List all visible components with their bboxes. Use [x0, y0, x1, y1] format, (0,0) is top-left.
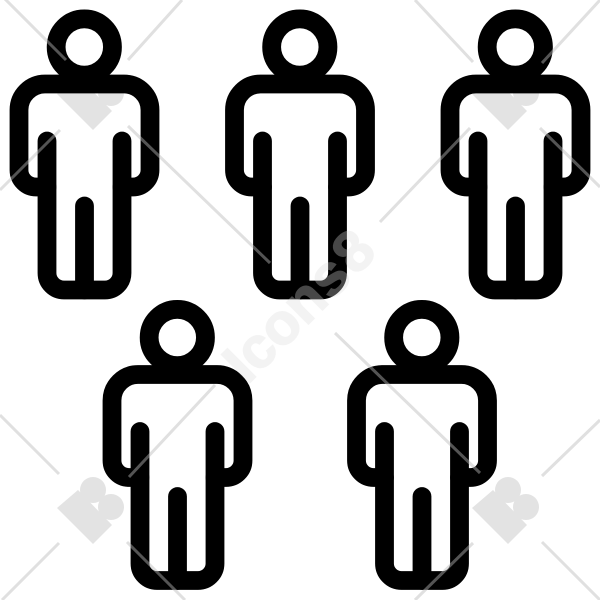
watermark logo: bottom right: [472, 477, 539, 544]
person icon: bottom left: [112, 309, 243, 580]
person icon: top left: [19, 19, 150, 290]
person icon: top centre: [234, 19, 366, 290]
watermark logo: bottom left: [57, 477, 124, 544]
watermark logo: top right: [472, 63, 539, 130]
person icon: bottom right: [356, 309, 488, 580]
watermark text: Icons8: [210, 217, 388, 395]
watermark logo: top left: [57, 63, 124, 130]
person icon: top right: [450, 19, 581, 290]
